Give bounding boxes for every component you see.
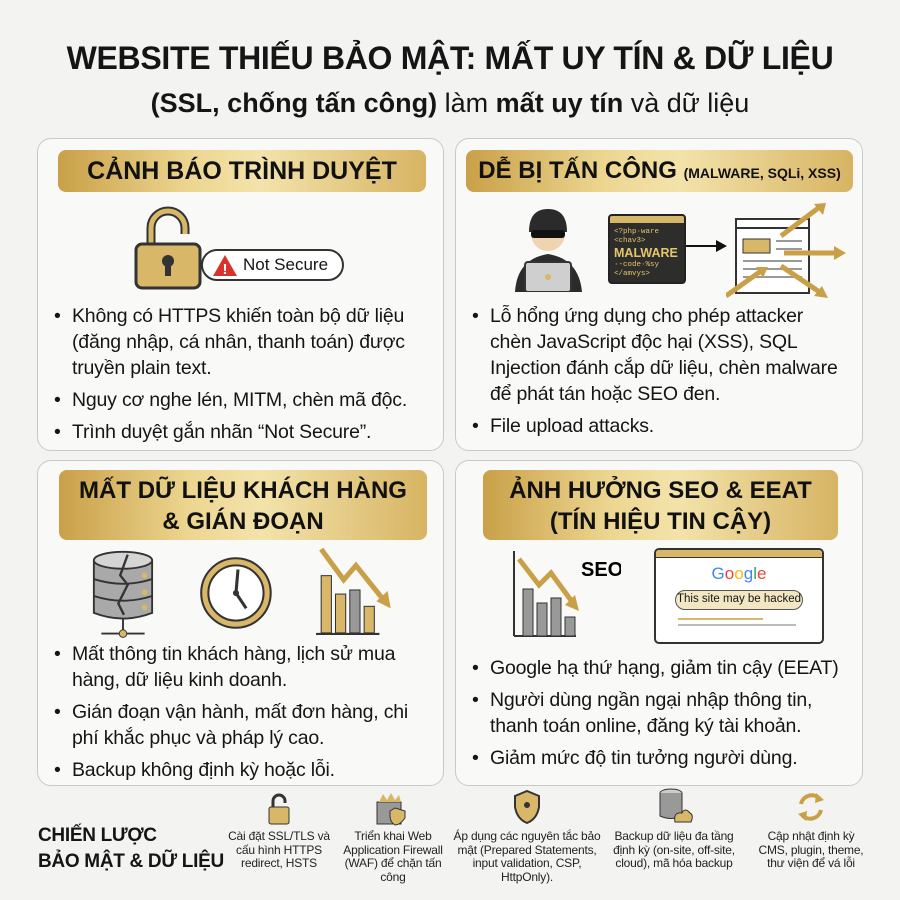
strategy heading: BẢO MẬT & DỮ LIỆU [38, 851, 224, 872]
bullets: Backup không định kỳ hoặc lỗi. [72, 759, 335, 781]
strategy 5: updates: Cập nhật định kỳ CMS, plugin, theme, thư viện để vá lỗi [759, 829, 863, 870]
icon: hacker [515, 209, 582, 292]
icon: malware code window [608, 214, 686, 284]
strategy 4: backup [613, 788, 735, 870]
bullets: Gián đoạn vận hành, mất đơn hàng, chi phí khắc phục và pháp lý cao. [72, 701, 408, 749]
heading: & GIÁN ĐOẠN [162, 508, 324, 535]
bullets: Người dùng ngần ngại nhập thông tin, thanh toán online, đăng ký tài khoản. [490, 689, 812, 737]
arrow [686, 240, 727, 252]
icon: Google hacked warning [654, 548, 824, 644]
panel: SEO & EEAT [455, 460, 863, 786]
badge: Not Secure [201, 249, 344, 281]
icon: broken database [92, 550, 154, 638]
icon: clock [200, 557, 272, 629]
strategy 1: SSL [228, 794, 330, 870]
strategy 2: WAF [343, 793, 443, 884]
icon: malware code window: <chav3> [614, 237, 646, 245]
bullets [54, 643, 408, 781]
heading: MẤT DỮ LIỆU KHÁCH HÀNG [79, 477, 407, 504]
icon: malware code window: MALWARE [614, 246, 678, 260]
title: WEBSITE THIẾU BẢO MẬT: MẤT UY TÍN & DỮ LIỆU [67, 40, 833, 76]
strategy 3: secure coding [454, 790, 600, 884]
icon: malware code window: </amvys> [614, 270, 650, 278]
heading [59, 470, 427, 540]
bullets [54, 305, 407, 443]
panel: data loss [37, 460, 444, 786]
icon: malware code window: <?php·ware [614, 228, 659, 236]
bullets: Giảm mức độ tin tưởng người dùng. [490, 747, 797, 769]
bullets: Nguy cơ nghe lén, MITM, chèn mã độc. [72, 389, 407, 411]
panel: attacks [455, 138, 863, 451]
bullets: Google hạ thứ hạng, giảm tin cậy (EEAT) [490, 657, 838, 679]
bullets: Lỗ hổng ứng dụng cho phép attacker chèn JavaScript độc hại (XSS), SQL Injection đánh cắp dữ liệu, chèn malware để phát tán hoặc SEO đen. [490, 305, 838, 405]
bullets: Mất thông tin khách hàng, lịch sử mua hàng, dữ liệu kinh doanh. [72, 643, 395, 691]
strategy 4: backup: Backup dữ liệu đa tầng định kỳ (on-site, off-site, cloud), mã hóa backup [613, 829, 735, 870]
bullets: Trình duyệt gắn nhãn “Not Secure”. [72, 421, 371, 443]
strategy heading: CHIẾN LƯỢC [38, 825, 157, 846]
strategy 5: updates [759, 793, 863, 870]
heading: ẢNH HƯỞNG SEO & EEAT [509, 477, 812, 504]
bullets: File upload attacks. [490, 415, 654, 437]
subtitle: (SSL, chống tấn công) làm mất uy tín và dữ liệu [151, 88, 749, 118]
icon: SEO falling chart [513, 551, 621, 637]
heading: CẢNH BÁO TRÌNH DUYỆT [87, 157, 397, 185]
heading [483, 470, 838, 540]
icon: open padlock [134, 206, 202, 290]
strategy 3: secure coding: Áp dụng các nguyên tắc bảo mật (Prepared Statements, input validation, CSP, HttpOnly). [454, 829, 600, 884]
bullets [472, 657, 838, 769]
strategy 1: SSL: Cài đặt SSL/TLS và cấu hình HTTPS redirect, HSTS [228, 829, 330, 870]
panel: browser warning [37, 138, 444, 451]
icon: malware code window: ·-code·%sy [614, 261, 659, 269]
icon: browser with spreading arrows [726, 203, 846, 298]
heading [58, 150, 426, 192]
badge: Not Secure: Not Secure [243, 255, 328, 274]
icon: Google hacked warning: Google [712, 564, 766, 583]
heading: (TÍN HIỆU TIN CẬY) [550, 508, 771, 535]
strategy heading [38, 824, 224, 872]
strategy 2: WAF: Triển khai Web Application Firewall (WAF) để chặn tấn công [343, 829, 443, 884]
heading: DỄ BỊ TẤN CÔNG (MALWARE, SQLi, XSS) [478, 157, 841, 184]
icon: falling bar chart [316, 548, 391, 635]
icon: Google hacked warning: This site may be hacked [677, 593, 801, 605]
heading [466, 150, 853, 192]
bullets: Không có HTTPS khiến toàn bộ dữ liệu (đăng nhập, cá nhân, thanh toán) được truyền plain text. [72, 305, 405, 379]
